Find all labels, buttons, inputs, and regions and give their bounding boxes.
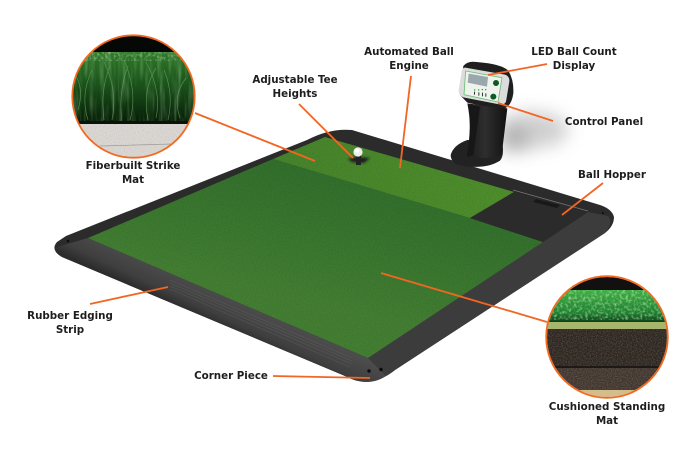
zoom circle: fiberbuilt strike mat [70, 34, 196, 160]
front-left edging band [55, 238, 386, 382]
LED display [468, 74, 488, 87]
label: LED ball count display: Display [553, 60, 596, 72]
leader: tee heights [299, 104, 353, 158]
leader: strike mat [195, 113, 315, 161]
leader: ball hopper [562, 183, 603, 215]
label: automated ball engine: Engine [389, 60, 429, 72]
leader: corner piece [273, 376, 370, 378]
corner screws [67, 212, 604, 373]
label: ball hopper: Ball Hopper [578, 169, 647, 181]
label: LED ball count display: LED Ball Count [531, 46, 617, 58]
label: cushioned standing mat: Mat [596, 415, 618, 427]
label: corner piece: Corner Piece [194, 370, 268, 382]
zoom circle: cushioned standing mat [545, 275, 669, 398]
label: adjustable tee heights: Heights [273, 88, 317, 100]
console post [467, 103, 507, 158]
label: fiberbuilt strike mat: Fiberbuilt Strike [86, 160, 180, 172]
leader lines [90, 64, 603, 378]
leader: LED display [488, 64, 547, 75]
label: control panel: Control Panel [565, 116, 643, 128]
leader: ball engine [400, 76, 411, 168]
label: adjustable tee heights: Adjustable Tee [252, 74, 338, 86]
label: cushioned standing mat: Cushioned Standing [549, 401, 665, 413]
buttons [493, 80, 499, 86]
rubber edging frame [54, 130, 614, 382]
leader: standing mat [381, 273, 547, 322]
label: automated ball engine: Automated Ball [364, 46, 454, 58]
control panel face [464, 71, 502, 102]
console base [451, 140, 503, 167]
strike mat strip [273, 137, 514, 218]
rubber edging strip ribs [170, 280, 352, 367]
console shadow [498, 112, 568, 153]
tee and golf ball [348, 147, 370, 165]
leader: rubber edging [90, 287, 168, 304]
main standing mat [88, 159, 543, 358]
label: rubber edging strip: Strip [56, 324, 84, 336]
leader: control panel [498, 103, 553, 121]
front-right edging band [368, 212, 610, 376]
label: rubber edging strip: Rubber Edging [27, 310, 113, 322]
console head [460, 62, 513, 108]
golf mat [54, 130, 614, 382]
label: fiberbuilt strike mat: Mat [122, 174, 144, 186]
ball hopper panel [470, 192, 588, 242]
bezel [459, 68, 509, 105]
control console [451, 62, 568, 167]
